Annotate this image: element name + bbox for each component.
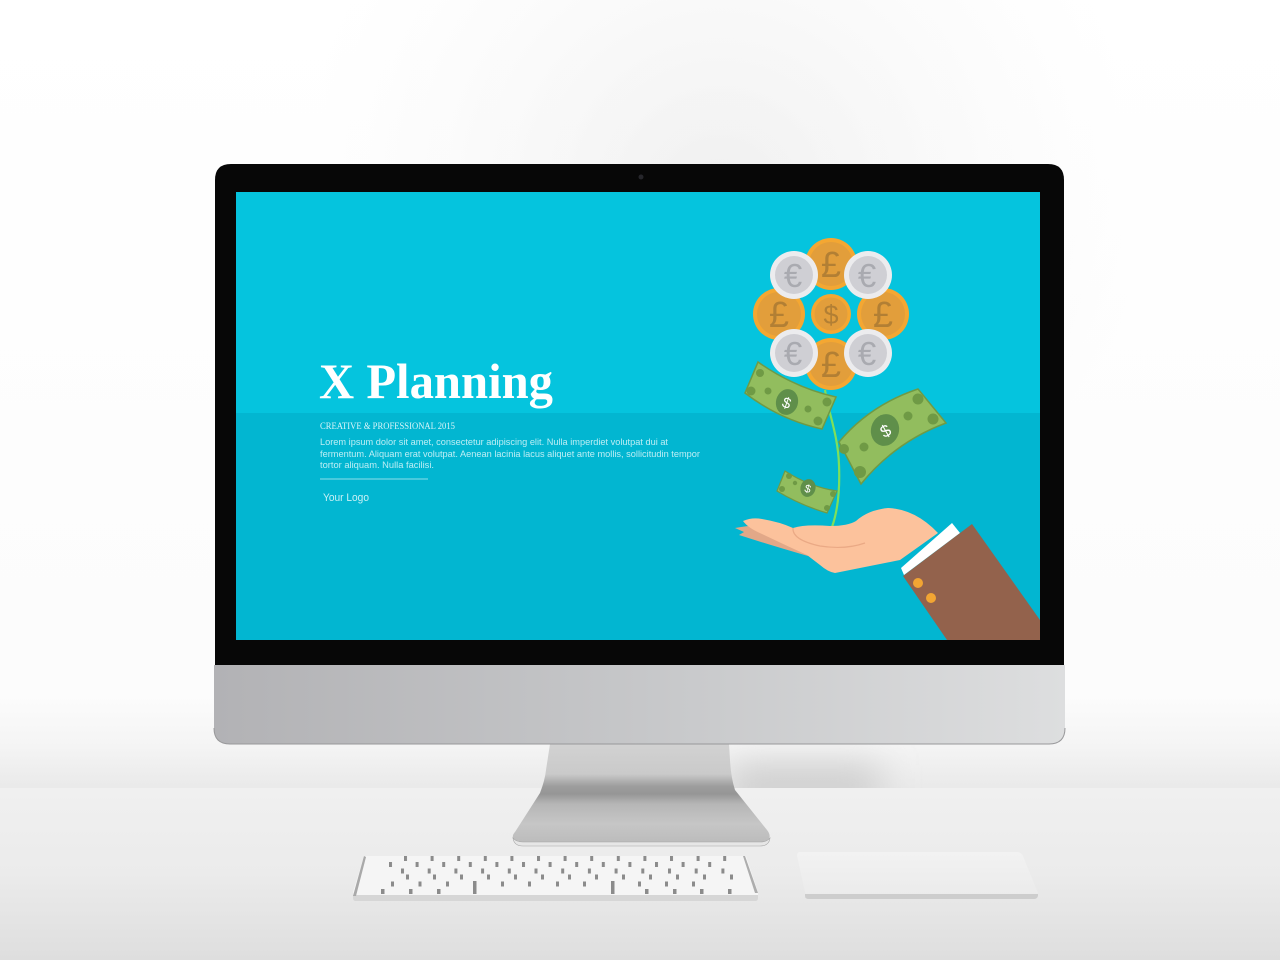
dollar coin centre: $ [823,300,839,330]
monitor [214,164,1065,744]
banknote left: $ [780,394,794,413]
logo placeholder: Your Logo [323,492,369,504]
monitor bezel [215,164,1064,665]
sleeve button [913,578,923,588]
euro coin top left: € [784,257,802,294]
monitor stand [513,744,770,846]
pound coin left: £ [769,294,789,335]
banknote small [777,471,837,513]
euro coin top left [770,251,818,299]
banknote small: $ [803,483,812,496]
banknote right: $ [877,420,895,442]
body text: fermentum. Aliquam erat volutpat. Aenean lacinia lacus aliquet ante mollis, sollicitudin tempor [320,449,700,459]
body text: tortor aliquam. Nulla facilisi. [320,460,434,470]
slide upper background [236,192,1040,413]
banknote right [839,389,946,484]
palm [743,508,938,573]
monitor chin [214,665,1065,744]
coin flower [753,238,909,390]
euro coin bottom right [844,329,892,377]
slide lower background [236,413,1040,640]
suit sleeve [903,524,1040,640]
webcam [638,174,644,180]
stand shadow on wall [730,765,880,805]
thumb crease [793,528,865,547]
pound coin top: £ [821,244,841,285]
title: X Planning [319,353,553,409]
sleeve button [926,593,936,603]
keyboard [353,856,758,901]
screen: slide [236,192,1040,640]
back fingers [735,525,808,556]
banknote left [745,362,836,429]
body text: Lorem ipsum dolor sit amet, consectetur adipiscing elit. Nulla imperdiet volutpat dui at [320,437,668,447]
pound coin bottom [805,338,857,390]
body text [320,437,700,470]
pound coin top [805,238,857,290]
subtitle: CREATIVE & PROFESSIONAL 2015 [320,422,455,432]
euro coin bottom right: € [858,335,876,372]
stem [825,390,839,527]
euro coin top right [844,251,892,299]
euro coin bottom left [770,329,818,377]
euro coin bottom left: € [784,335,802,372]
trackpad [797,852,1038,899]
shirt cuff [901,523,960,575]
pound coin bottom: £ [821,344,841,385]
pound coin left [753,288,805,340]
hand [735,508,938,573]
pound coin right [857,288,909,340]
dollar coin centre [811,294,851,334]
desk surface [0,788,1280,960]
pound coin right: £ [873,294,893,335]
euro coin top right: € [858,257,876,294]
